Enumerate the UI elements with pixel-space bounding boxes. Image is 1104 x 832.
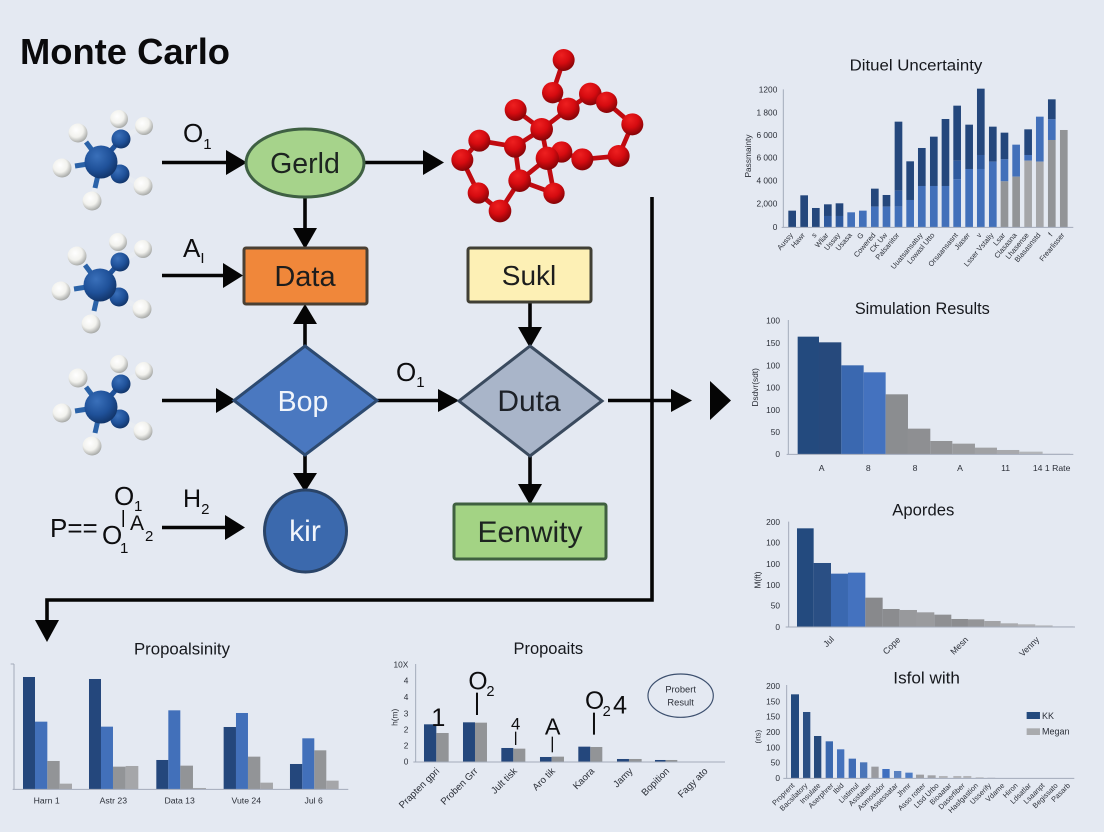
x axis labels: Prapten gpri xyxy=(397,766,442,811)
x axis labels: Vute 24 xyxy=(232,796,261,806)
x axis labels: 11 xyxy=(1001,463,1010,473)
label: O1 on Bop arrow: O xyxy=(396,357,416,387)
x axis labels: Jul xyxy=(821,634,836,649)
x axis labels: A xyxy=(819,463,825,473)
y axis tick labels: 100 xyxy=(766,383,780,393)
node: Gerld xyxy=(246,129,364,197)
x axis labels: s xyxy=(809,231,819,239)
x axis labels: Lowasl Utto xyxy=(905,231,937,266)
annotations above bars: 4 xyxy=(511,714,520,733)
formula: P==O1 A2: 1 xyxy=(120,540,128,557)
x axis labels: Ussay xyxy=(822,231,842,252)
x axis labels: Listimul xyxy=(837,781,861,805)
x axis labels: Jhmr xyxy=(895,781,913,799)
x axis labels: Usserify xyxy=(968,781,993,806)
callout: Probert Result: Probert xyxy=(665,684,696,694)
x axis labels: Begissato xyxy=(1031,781,1060,810)
formula: P==O1 A2: O xyxy=(102,520,122,550)
x axis labels: Usasa xyxy=(834,230,854,253)
chart: Simulation Results xyxy=(750,300,1073,473)
arrow: Bop to Data xyxy=(293,304,317,347)
node: Duta xyxy=(459,346,602,456)
x axis labels: 8 xyxy=(866,463,871,473)
arrow: feedback line to lower charts xyxy=(35,197,652,642)
label: O1: 1 xyxy=(203,136,212,153)
arrow: A1 to Data xyxy=(162,263,243,288)
x axis labels: Assessatar xyxy=(868,781,900,813)
formula: P==O1 A2: A xyxy=(130,512,144,535)
y axis tick labels xyxy=(766,517,780,632)
annotations above bars: 1 xyxy=(431,704,445,732)
chart: Propoalsinity xyxy=(11,640,348,806)
node: Sukl: Sukl xyxy=(502,260,556,291)
node: Data: Data xyxy=(274,261,336,293)
arrow: Bop to kir xyxy=(293,455,317,492)
node: Data xyxy=(244,248,367,304)
chart title: Propoalsinity xyxy=(134,640,231,658)
x axis labels: Cope xyxy=(881,635,903,656)
y axis tick labels: 50 xyxy=(771,427,780,437)
y axis tick labels: 4 xyxy=(404,692,409,702)
chart: Dituel Uncertainty xyxy=(743,58,1073,271)
label: H2: 2 xyxy=(201,501,209,518)
y axis tick labels: 0 xyxy=(404,757,409,767)
annotations above bars xyxy=(431,668,627,752)
x axis labels xyxy=(819,463,1071,473)
x axis labels: 8 xyxy=(913,463,918,473)
y axis tick labels xyxy=(766,681,780,783)
y axis tick labels: 200 xyxy=(766,681,780,691)
legend: Megan xyxy=(1042,727,1069,737)
stacked bars xyxy=(788,89,1068,227)
x axis labels: Jult tisk xyxy=(489,766,520,797)
label: A1: A xyxy=(183,233,200,263)
formula: P==O1 A2: O xyxy=(114,481,134,511)
icon: blue molecule 3 xyxy=(52,355,153,456)
label: O1: O xyxy=(183,118,203,148)
arrow: O1 to Gerld xyxy=(162,150,247,175)
y axis tick labels: 100 xyxy=(766,405,780,415)
icon: blue molecule 1 xyxy=(52,110,153,210)
x axis labels: Aussy xyxy=(775,231,795,252)
chart: Propoaits xyxy=(389,640,725,811)
annotations above bars: A xyxy=(545,713,561,739)
x axis labels: CK Uw xyxy=(868,230,890,254)
x axis labels xyxy=(821,634,1042,659)
x axis labels: Ibid xyxy=(831,781,846,796)
y axis tick labels: 200 xyxy=(766,727,780,737)
label: A1: I xyxy=(200,250,205,267)
node: Sukl xyxy=(468,248,591,302)
x axis labels: Bioaatar xyxy=(928,781,954,807)
chart: Isfol with xyxy=(754,669,1074,815)
y axis tick labels: 2 xyxy=(404,741,409,751)
label: O1 on Bop arrow: 1 xyxy=(416,374,425,391)
x axis labels: Harn 1 xyxy=(34,796,60,806)
chart title: Apordes xyxy=(892,502,954,520)
x axis labels xyxy=(775,230,1067,271)
y axis tick labels: 100 xyxy=(766,538,780,548)
x axis labels: Mesn xyxy=(948,634,970,657)
y axis title: Dsdvr(sdt) xyxy=(750,368,760,407)
node: Duta: Duta xyxy=(497,385,561,418)
legend xyxy=(1027,711,1069,737)
arrow: H2 to kir xyxy=(162,515,245,540)
y axis tick labels: 10X xyxy=(394,660,409,670)
x axis labels: Hawr xyxy=(789,230,807,250)
annotations above bars: 2 xyxy=(603,704,611,720)
x axis labels: 14 1 Rate xyxy=(1033,463,1071,473)
y axis tick labels: 100 xyxy=(766,580,780,590)
x axis labels: Insulate xyxy=(798,781,822,806)
y axis tick labels: 150 xyxy=(766,338,780,348)
x axis labels: Ltsd Urbo xyxy=(912,781,941,810)
y axis tick labels: 0 xyxy=(775,773,780,783)
y axis tick labels: 50 xyxy=(771,758,780,768)
x axis labels: Bopition xyxy=(640,766,672,798)
title: Monte Carlo xyxy=(20,31,230,72)
x axis labels: Kaora xyxy=(571,766,598,792)
x axis labels: Daserfiber xyxy=(936,781,967,811)
y axis title: M(ft) xyxy=(753,571,763,589)
arrow: Gerld to red molecule xyxy=(365,150,444,175)
x axis labels: Hasfgastion xyxy=(946,781,980,815)
chart title: Isfol with xyxy=(893,669,960,687)
y axis tick labels: 150 xyxy=(766,712,780,722)
histogram bars xyxy=(798,337,1070,454)
x axis labels: Lsser Vstaliy xyxy=(962,231,996,268)
x axis labels: Jul 6 xyxy=(304,796,323,806)
y axis tick labels: 2 xyxy=(404,725,409,735)
bars xyxy=(791,694,995,778)
y axis tick labels: 4 xyxy=(404,676,409,686)
annotations above bars: O xyxy=(468,668,488,695)
x axis labels xyxy=(770,781,1072,815)
x axis labels: v xyxy=(974,231,984,239)
x axis labels xyxy=(397,765,710,811)
x axis labels: Vdame xyxy=(984,781,1006,804)
x axis labels xyxy=(34,796,323,806)
x axis labels: Ldsatlar xyxy=(1008,781,1033,806)
grouped bars xyxy=(23,677,339,789)
y axis title: (rts) xyxy=(754,729,763,743)
x axis labels: f xyxy=(1046,230,1055,238)
x axis labels: Palsanitor xyxy=(873,230,902,262)
arrow: Duta to Eenwity xyxy=(518,456,542,505)
y axis tick labels: 100 xyxy=(766,559,780,569)
y axis tick labels xyxy=(756,84,778,232)
x axis labels: Fagy ato xyxy=(676,766,710,800)
y axis tick labels: 200 xyxy=(766,517,780,527)
callout: Probert Result xyxy=(648,674,713,717)
y axis tick labels: 100 xyxy=(766,360,780,370)
y axis tick labels: 100 xyxy=(766,742,780,752)
histogram bars xyxy=(797,528,1073,627)
x axis labels: Lsar xyxy=(991,230,1008,248)
x axis labels: Clasasna xyxy=(992,230,1019,260)
arrow: Duta to results xyxy=(608,389,692,412)
node: Bop xyxy=(234,346,377,455)
x axis labels: Bacsilatory xyxy=(778,781,810,813)
x axis labels: Uuatsansatuy xyxy=(889,231,925,271)
x axis labels: Lhasense xyxy=(1004,231,1031,261)
x axis labels: Jiaser xyxy=(952,230,972,252)
y axis title: Passmainty xyxy=(743,134,753,178)
legend: KK xyxy=(1042,711,1054,721)
y axis title: h(m) xyxy=(389,709,399,726)
y axis tick labels: 1 800 xyxy=(756,107,778,117)
x axis labels: Frearlisser xyxy=(1037,230,1067,263)
x axis labels: Venny xyxy=(1017,634,1042,659)
y axis tick labels: 0 xyxy=(773,222,778,232)
node: Eenwity xyxy=(454,504,606,559)
x axis labels: Aserphrer xyxy=(806,781,836,810)
chart title: Simulation Results xyxy=(855,300,990,318)
x axis labels: Aro tik xyxy=(531,766,558,793)
x axis labels: G xyxy=(855,231,866,241)
x axis labels: Asso rotter xyxy=(896,781,928,812)
chart title: Propoaits xyxy=(513,640,583,658)
y axis tick labels xyxy=(394,660,409,767)
arrow: molecule to Bop xyxy=(162,388,236,413)
y axis tick labels xyxy=(766,316,780,459)
paired bars xyxy=(424,722,677,762)
y axis tick labels: 3 xyxy=(404,708,409,718)
formula: P==O1 A2 xyxy=(50,481,153,557)
x axis labels: Proprent xyxy=(770,781,796,807)
formula: P==O1 A2: 1 xyxy=(134,498,142,515)
icon: red molecule xyxy=(451,49,643,222)
x axis labels: Asstatter xyxy=(847,781,874,808)
icon: blue molecule 2 xyxy=(52,233,152,334)
y axis tick labels: 1200 xyxy=(759,84,778,94)
arrow: Sukl to Duta xyxy=(518,302,542,348)
annotations above bars: 2 xyxy=(486,684,494,700)
y axis tick labels: 2,000 xyxy=(756,199,778,209)
y axis tick labels: 4 000 xyxy=(756,176,778,186)
x axis labels: Proben Grr xyxy=(439,765,481,808)
chart title: Dituel Uncertainty xyxy=(850,58,983,75)
x axis labels: Jamy xyxy=(611,766,636,790)
arrow: Bop to Duta xyxy=(377,389,459,412)
x axis labels: A xyxy=(957,463,963,473)
x axis labels: Data 13 xyxy=(164,796,195,806)
annotations above bars: 4 xyxy=(613,691,627,719)
formula: P==O1 A2: 2 xyxy=(145,528,153,545)
y axis tick labels: 150 xyxy=(766,696,780,706)
node: kir: kir xyxy=(289,515,321,548)
y axis tick labels: 100 xyxy=(766,316,780,326)
arrow: large triangle toward charts xyxy=(710,381,731,420)
x axis labels: Hiron xyxy=(1001,781,1020,800)
x axis labels: Blasasnstd xyxy=(1013,231,1043,264)
x axis labels: Orsaansasnt xyxy=(926,231,960,268)
annotations above bars: O xyxy=(585,688,604,715)
y axis tick labels: 0 xyxy=(775,449,780,459)
y axis tick labels: 6 000 xyxy=(756,153,778,163)
callout: Probert Result: Result xyxy=(667,697,694,707)
x axis labels: Lsaanpt xyxy=(1022,781,1046,806)
formula: P==O1 A2: P== xyxy=(50,513,98,543)
x axis labels: Astr 23 xyxy=(100,796,127,806)
chart: Apordes xyxy=(753,502,1075,659)
x axis labels: Cowered xyxy=(852,231,878,259)
x axis labels: Pasarb xyxy=(1049,781,1072,804)
x axis labels: Asmostdor xyxy=(856,781,887,812)
node: Bop: Bop xyxy=(278,386,328,418)
x axis labels: Wliar xyxy=(813,230,831,249)
arrow: Gerld to Data xyxy=(293,197,317,249)
node: Eenwity: Eenwity xyxy=(477,516,583,549)
y axis tick labels: 0 xyxy=(775,622,780,632)
node: kir xyxy=(264,490,346,572)
node: Gerld: Gerld xyxy=(270,148,340,180)
label: H2: H xyxy=(183,485,201,513)
y axis tick labels: 50 xyxy=(771,601,780,611)
y axis tick labels: 6 000 xyxy=(756,130,778,140)
